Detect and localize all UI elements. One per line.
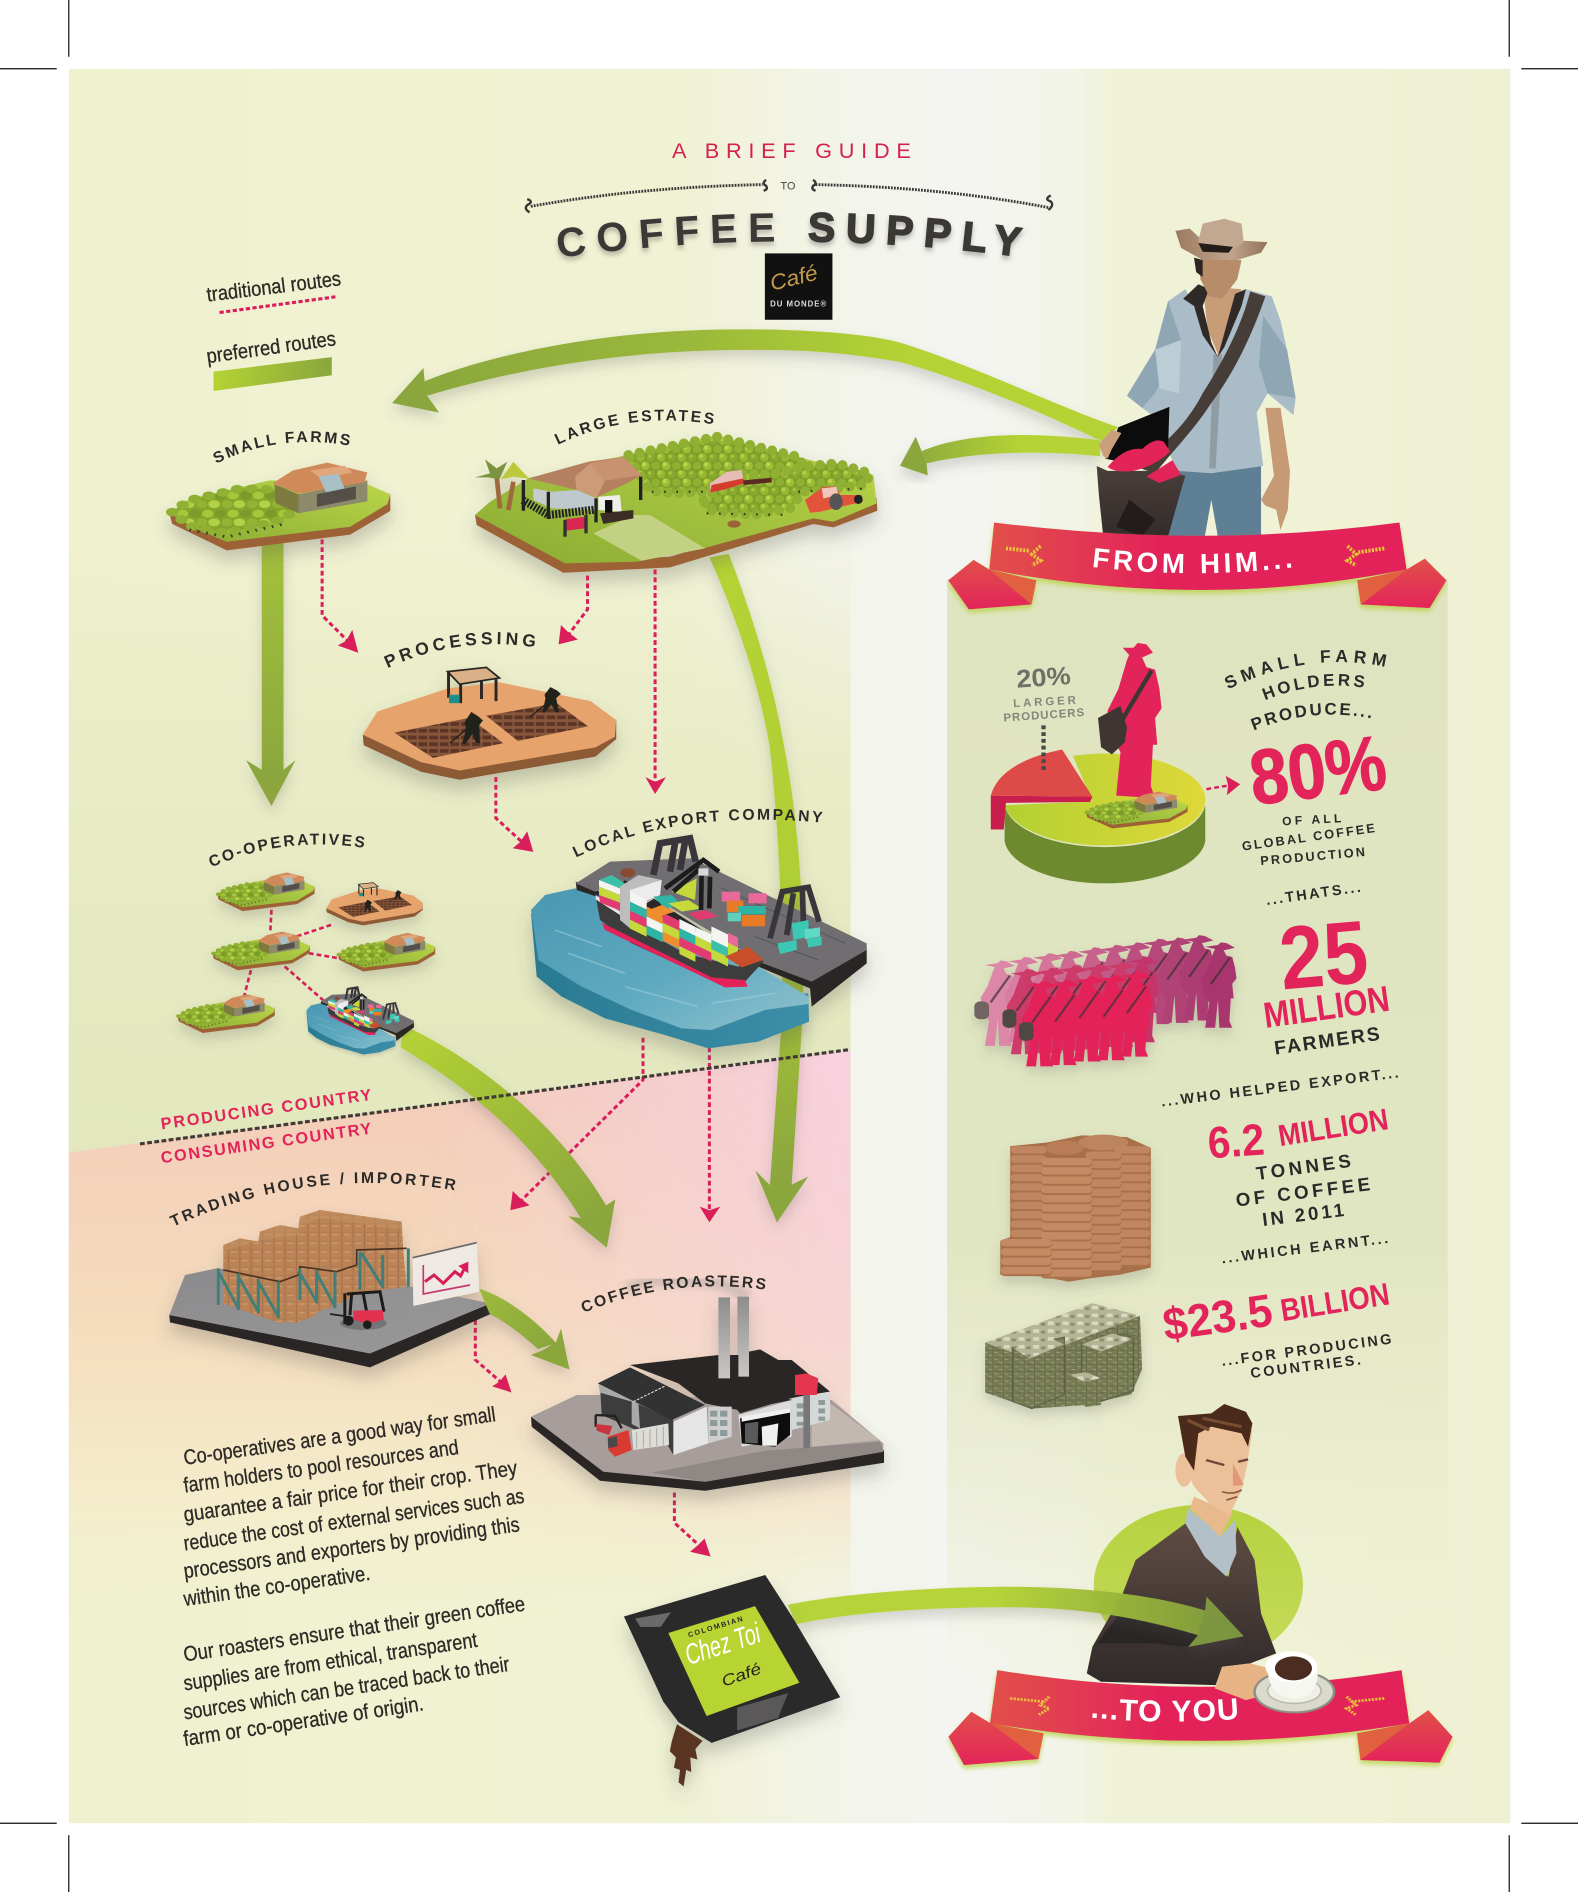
stat: 6.2 million tonnes: TONNES — [1255, 1150, 1352, 1184]
text block: roasters explanation: Our roasters ensure that their green coffee — [182, 1593, 527, 1666]
text: for producing countries: ...FOR PRODUCING — [1221, 1332, 1392, 1370]
processing label: PROCESSING — [384, 632, 535, 668]
text block: roasters explanation: sources which can be traced back to their — [182, 1653, 511, 1724]
co-operative mini farms — [178, 873, 435, 1033]
farmer — [1097, 219, 1296, 536]
ribbon: to you — [948, 1670, 1453, 1765]
route: large estates to processing — [559, 576, 588, 644]
route: processing to export — [496, 777, 533, 852]
stat: 25 million farmers: FARMERS — [1273, 1024, 1381, 1060]
ribbon text: from him: FROM HIM... — [1094, 548, 1292, 574]
bag body — [624, 1575, 840, 1786]
text block: roasters explanation: supplies are from ethical, transparent — [182, 1629, 479, 1695]
stat: of all global coffee production — [1241, 811, 1376, 868]
arrow: coffee bag to you — [788, 1587, 1244, 1647]
logo: Cafe du Monde — [765, 253, 832, 320]
20% label — [1003, 662, 1085, 725]
smoke — [627, 1280, 748, 1297]
hand and coffee cup — [1215, 1651, 1334, 1712]
20% label: LARGER — [1013, 695, 1077, 710]
farmer crowd — [974, 935, 1236, 1066]
text: which earnt: ...WHICH EARNT... — [1221, 1231, 1389, 1267]
main title: COFFEE SUPPLY — [556, 212, 1024, 262]
port and ship illustration — [531, 838, 867, 1048]
20% label: 20% — [1015, 662, 1072, 694]
co-operatives cluster — [176, 834, 437, 1044]
export label: LOCAL EXPORT COMPANY — [572, 808, 823, 858]
bag label text: COLOMBIAN — [687, 1614, 744, 1639]
trading house label: TRADING HOUSE / IMPORTER — [169, 1172, 456, 1226]
small farms label: SMALL FARMS — [213, 431, 350, 462]
stat: 23.5 billion — [1160, 1276, 1392, 1350]
route: roasters to bag — [674, 1493, 711, 1557]
stat: 80%: 80% — [1245, 720, 1391, 822]
bag label text: Chez Toi — [681, 1617, 765, 1672]
stat: small farm holders: HOLDERS — [1262, 674, 1364, 700]
country divider — [140, 1050, 848, 1167]
stat: 6.2 million tonnes: IN 2011 — [1261, 1199, 1345, 1230]
traditional route arrows — [322, 539, 720, 1557]
stat: 6.2 million tonnes: 6.2 — [1206, 1116, 1266, 1168]
local export company — [524, 808, 874, 1066]
producing country label: PRODUCING COUNTRY — [160, 1086, 373, 1133]
title — [524, 138, 1054, 262]
text block: co-operatives explanation: farm holders to pool resources and — [182, 1436, 460, 1498]
20% wedge and 80% wedge — [991, 643, 1205, 883]
text block: roasters explanation: farm or co-operative of origin. — [182, 1692, 425, 1751]
route: small farms to processing — [322, 539, 358, 653]
logo: Cafe du Monde: Café — [767, 260, 820, 296]
co-operative mini port — [306, 987, 414, 1055]
large estates label: LARGE ESTATES — [554, 410, 714, 444]
stat: 25 million farmers: MILLION — [1261, 978, 1392, 1036]
stat: of all global coffee production: GLOBAL COFFEE — [1241, 821, 1376, 854]
text: who helped export: ...WHO HELPED EXPORT... — [1160, 1065, 1399, 1110]
coffee bag — [624, 1575, 840, 1786]
text: thats: ...THATS... — [1265, 880, 1362, 909]
text block: co-operatives explanation: within the co-operative. — [181, 1562, 372, 1611]
arrow: co-operative to roasters — [401, 1026, 615, 1248]
logo: Cafe du Monde: DU MONDE® — [770, 299, 827, 308]
text block: co-operatives explanation: Co-operatives are a good way for small — [182, 1403, 497, 1470]
ribbon: from him — [948, 522, 1446, 609]
trading house — [164, 1172, 494, 1384]
money stacks — [985, 1303, 1142, 1409]
text block: co-operatives explanation: reduce the cost of external services such as — [182, 1485, 526, 1555]
text block: co-operatives explanation — [181, 1403, 526, 1611]
route: trading house to roasters — [475, 1320, 512, 1392]
stat: 6.2 million tonnes: OF COFFEE — [1235, 1173, 1371, 1211]
route: export to roasters — [700, 1047, 720, 1222]
coffee sacks — [1000, 1135, 1151, 1282]
legend: traditional routes: traditional routes — [205, 267, 342, 307]
legend — [205, 267, 342, 391]
text: for producing countries: COUNTRIES. — [1250, 1353, 1362, 1382]
consuming country label: CONSUMING COUNTRY — [160, 1120, 373, 1167]
arrow: farmer to large estates — [900, 435, 1100, 475]
route: large estates to export — [645, 570, 666, 794]
arrow: large estates to roasters — [709, 554, 808, 1222]
stat: 23.5 billion: $23.5 — [1160, 1285, 1276, 1350]
large estate illustration — [475, 435, 877, 573]
small farm on pie — [1086, 792, 1188, 828]
co-operatives label: CO-OPERATIVES — [209, 834, 364, 866]
stat: 23.5 billion: BILLION — [1278, 1276, 1392, 1328]
legend: preferred routes: preferred routes — [205, 327, 337, 368]
co-operative links — [244, 910, 338, 1000]
stat: small farm holders: SMALL FARM — [1224, 650, 1386, 688]
title flourish lines — [526, 180, 1052, 212]
stat: 6.2 million tonnes: MILLION — [1276, 1103, 1391, 1153]
arrow: trading house to roasters — [479, 1289, 569, 1370]
factory illustration — [531, 1297, 884, 1491]
pie chart: 80 / 20 — [991, 643, 1240, 883]
stat: small farm holders: PRODUCE... — [1250, 702, 1371, 730]
bag label text: Café — [719, 1661, 764, 1691]
text block: co-operatives explanation: guarantee a fair price for their crop. They — [182, 1457, 519, 1527]
stat: 25 million farmers — [1261, 901, 1392, 1060]
bag label text — [681, 1614, 765, 1691]
small farm illustration — [169, 463, 390, 550]
arrow: small farms to co-operatives — [246, 537, 296, 806]
island: small farms — [164, 431, 396, 568]
stat: 25 million farmers: 25 — [1275, 901, 1372, 1008]
man with coffee — [1087, 1404, 1276, 1685]
route to 80% — [1206, 776, 1240, 795]
title kicker: A BRIEF GUIDE — [672, 138, 911, 163]
title connector word: TO — [781, 180, 795, 192]
coffee roasters — [527, 1275, 890, 1508]
ribbon text: to you: ...TO YOU — [1092, 1698, 1237, 1722]
text block: co-operatives explanation: processors and exporters by providing this — [182, 1513, 521, 1583]
stat: of all global coffee production: PRODUCTION — [1260, 845, 1366, 868]
processing — [358, 632, 623, 797]
island: large estates — [471, 410, 884, 590]
stat: 6.2 million tonnes — [1206, 1103, 1391, 1230]
processing illustration — [363, 667, 616, 780]
man: lime disc — [1094, 1505, 1303, 1665]
route: export to trading house — [510, 1038, 643, 1210]
text block: roasters explanation — [182, 1593, 527, 1751]
20% label: PRODUCERS — [1003, 707, 1085, 725]
stat: small farm holders — [1224, 650, 1386, 730]
warehouse illustration — [169, 1210, 491, 1367]
coffee roasters label: COFFEE ROASTERS — [582, 1275, 766, 1312]
stat: of all global coffee production: OF ALL — [1282, 811, 1342, 828]
arrow: farmer to small farms — [392, 329, 1118, 442]
